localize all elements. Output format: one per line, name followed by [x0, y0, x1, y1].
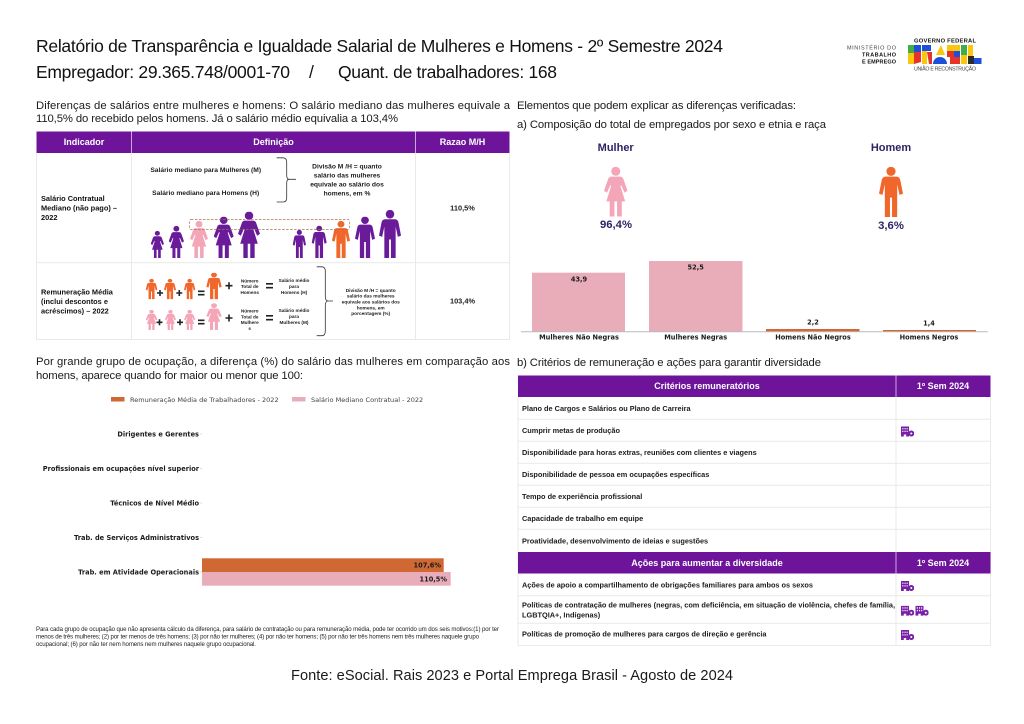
logo: ministério: TRABALHO — [862, 52, 897, 58]
header: critérios — [518, 376, 990, 397]
title — [36, 36, 723, 82]
value: 103,4%: 103,4% — [450, 296, 475, 306]
label: homem: Homem — [871, 142, 911, 154]
header: critérios: Critérios remuneratórios — [654, 381, 760, 391]
intro paragraph: 110,5% do recebido pelos homens. Já o salário médio equivalia a 103,4% — [36, 113, 398, 125]
division note: median — [310, 163, 384, 197]
logo: ministério — [847, 44, 897, 66]
bar chart: sex and race: 2,2 — [807, 318, 819, 326]
icon: company — [901, 426, 914, 436]
icon: woman — [604, 167, 628, 216]
criteria list: Tempo de experiência profissional — [522, 492, 642, 501]
icons: companies — [901, 581, 929, 640]
title: Empregador: 29.365.748/0001-70 — [36, 62, 290, 82]
men average formula: Homens (H) — [281, 290, 308, 295]
row label: remuneração média — [41, 288, 114, 316]
title: Quant. de trabalhadores: 168 — [338, 62, 557, 82]
header: ações: 1º Sem 2024 — [917, 558, 969, 568]
bar chart: sex and race: 43,9 — [571, 276, 588, 284]
chart legend — [111, 396, 423, 404]
heading: critérios: b) Critérios de remuneração e ações para garantir diversidade — [517, 357, 821, 369]
header: critérios: 1º Sem 2024 — [917, 381, 969, 391]
logo: governo federal brasil: UNIÃO E RECONSTRUÇÃO — [914, 66, 976, 72]
panel: criteria table — [518, 376, 990, 646]
footnote: Para cada grupo de ocupação que não apresenta cálculo da diferença, para salário de contratação ou para remuneração média, pode ter ocorrido um dos seis motivos:(1) por ter — [36, 626, 499, 633]
bar chart: occupation: 110,5% — [420, 576, 447, 584]
table header: Indicador — [64, 137, 105, 147]
men average formula — [146, 273, 310, 299]
chart legend: Remuneração Média de Trabalhadores - 2022 — [130, 396, 279, 404]
bar chart: occupation: Trab. em Atividade Operacionais — [78, 568, 199, 576]
bar chart: sex and race — [521, 261, 988, 342]
men average formula: para — [289, 284, 299, 289]
value: 110,5%: 110,5% — [450, 204, 475, 212]
women average formula: Mulheres (M) — [280, 320, 309, 325]
header: ações — [518, 552, 990, 574]
actions list — [522, 580, 895, 638]
women average formula: Mulhere — [241, 320, 259, 325]
intro paragraph: Diferenças de salários entre mulheres e homens: O salário mediano das mulheres equivale a — [36, 100, 511, 112]
dashed median box — [190, 220, 350, 230]
bar chart: sex and race: Mulheres Não Negras — [539, 334, 619, 342]
women average formula: Total de — [241, 314, 259, 319]
bar chart: occupation: 107,6% — [414, 562, 441, 570]
occupation paragraph: homens, aparece quando for maior ou menor que 100: — [36, 370, 303, 382]
panel: indicator table — [36, 132, 510, 340]
criteria list: Disponibilidade para horas extras, reuniões com clientes e viagens — [522, 448, 757, 457]
chart legend: Salário Mediano Contratual - 2022 — [311, 396, 423, 404]
women median row — [151, 212, 260, 258]
bar chart: sex and race: Mulheres Negras — [664, 334, 727, 342]
footnote: menos de três mulheres; (2) por ter menos de três homens; (3) por não ter mulheres; (4) por não ter homens; (5) por não ter três homens nem três mulheres naquele grupo — [36, 634, 480, 640]
women average formula: Número — [241, 308, 259, 313]
footnote — [36, 626, 499, 648]
actions list: Políticas de promoção de mulheres para cargos de direção e gerência — [522, 630, 767, 638]
occupation paragraph — [36, 356, 510, 382]
actions list: Políticas de contratação de mulheres (negras, com deficiência, em situação de violência, chefes de família, — [522, 601, 895, 610]
division note: average: equivale aos salários dos — [342, 300, 400, 306]
title: Relatório de Transparência e Igualdade Salarial de Mulheres e Homens - 2º Semestre 2024 — [36, 36, 723, 56]
men median row — [293, 210, 401, 258]
men average formula: Número — [241, 278, 259, 283]
value: men share: 3,6% — [878, 220, 904, 232]
row label: remuneração média: Remuneração Média — [41, 288, 114, 296]
men average formula: Salário médio — [279, 278, 310, 283]
division note: median: equivale ao salário dos — [310, 181, 384, 188]
header: ações: Ações para aumentar a diversidade — [631, 558, 783, 568]
footnote: ocupacional; (6) por não ter nem homens nem mulheres naquele grupo ocupacional. — [36, 641, 256, 648]
bar chart: sex and race: Homens Negros — [900, 334, 958, 342]
bracket: average — [317, 267, 333, 336]
row label: salário contratual: Salário Contratual — [41, 194, 105, 203]
title: / — [309, 62, 314, 82]
logo: ministério: MINISTÉRIO DO — [847, 44, 897, 52]
row label: remuneração média: (inclui descontos e — [41, 297, 108, 306]
heading: composição: a) Composição do total de empregados por sexo e etnia e raça — [517, 119, 827, 131]
bar chart: occupation: Técnicos de Nível Médio — [110, 500, 199, 508]
table header — [36, 132, 510, 153]
women average formula: Salário médio — [279, 308, 310, 313]
icon: man — [879, 167, 903, 217]
bar chart: occupation: Trab. de Serviços Administrativos — [74, 534, 199, 542]
women average formula: s — [248, 326, 251, 331]
actions list: LGBTQIA+, Indígenas) — [522, 610, 601, 619]
men average formula: Total de — [241, 284, 259, 289]
intro paragraph — [36, 100, 511, 125]
row label: salário contratual — [41, 194, 117, 222]
division note: average: salário das mulheres — [347, 294, 395, 300]
logo: governo federal brasil: GOVERNO FEDERAL — [914, 38, 976, 44]
criteria list: Disponibilidade de pessoa em ocupações específicas — [522, 470, 709, 479]
division note: median: homens, em % — [324, 190, 370, 197]
median definition text — [150, 167, 261, 197]
actions list: Ações de apoio a compartilhamento de obrigações familiares para ambos os sexos — [522, 580, 813, 590]
criteria list: Capacidade de trabalho em equipe — [522, 514, 643, 523]
division note: average — [342, 288, 400, 317]
men average formula: Homens — [240, 290, 259, 295]
row label: salário contratual: Mediano (não pago) – — [41, 204, 117, 212]
criteria list: Proatividade, desenvolvimento de ideias e sugestões — [522, 536, 708, 546]
logo: governo federal brasil — [908, 38, 982, 72]
division note: median: Divisão M /H = quanto — [312, 163, 382, 170]
value: women share: 96,4% — [600, 219, 632, 231]
criteria list: Cumprir metas de produção — [522, 426, 620, 435]
criteria list — [522, 404, 757, 546]
bar chart: sex and race: Homens Não Negros — [775, 334, 851, 342]
heading: elementos: Elementos que podem explicar as diferenças verificadas: — [517, 100, 796, 112]
row label: salário contratual: 2022 — [41, 213, 57, 222]
women average formula: para — [289, 314, 299, 319]
criteria list: Plano de Cargos e Salários ou Plano de Carreira — [522, 404, 691, 413]
bar chart: occupation: Profissionais em ocupações nível superior — [43, 465, 200, 473]
bar chart: occupation — [43, 430, 451, 586]
bar chart: sex and race: 1,4 — [923, 320, 935, 328]
bar chart: occupation: Dirigentes e Gerentes — [117, 430, 199, 438]
median definition text: Salário mediano para Mulheres (M) — [150, 167, 261, 174]
bar chart: sex and race: 52,5 — [688, 264, 704, 272]
median definition text: Salário mediano para Homens (H) — [152, 190, 259, 197]
bracket: median — [277, 158, 296, 202]
table header: Definição — [253, 137, 294, 147]
logo: ministério: E EMPREGO — [862, 60, 897, 66]
division note: average: porcentagem (%) — [351, 311, 391, 317]
division note: median: salário das mulheres — [314, 172, 381, 179]
division note: average: Divisão M /H = quanto — [346, 288, 396, 294]
row label: remuneração média: acréscimos) – 2022 — [41, 306, 109, 316]
division note: average: homens, em — [357, 306, 385, 312]
label: mulher: Mulher — [598, 142, 634, 154]
panel: sex split — [598, 142, 911, 232]
table header: Razao M/H — [440, 137, 485, 147]
women average formula — [146, 303, 310, 331]
occupation paragraph: Por grande grupo de ocupação, a diferença (%) do salário das mulheres em comparação aos — [36, 356, 510, 368]
source: Fonte: eSocial. Rais 2023 e Portal Emprega Brasil - Agosto de 2024 — [291, 668, 733, 684]
